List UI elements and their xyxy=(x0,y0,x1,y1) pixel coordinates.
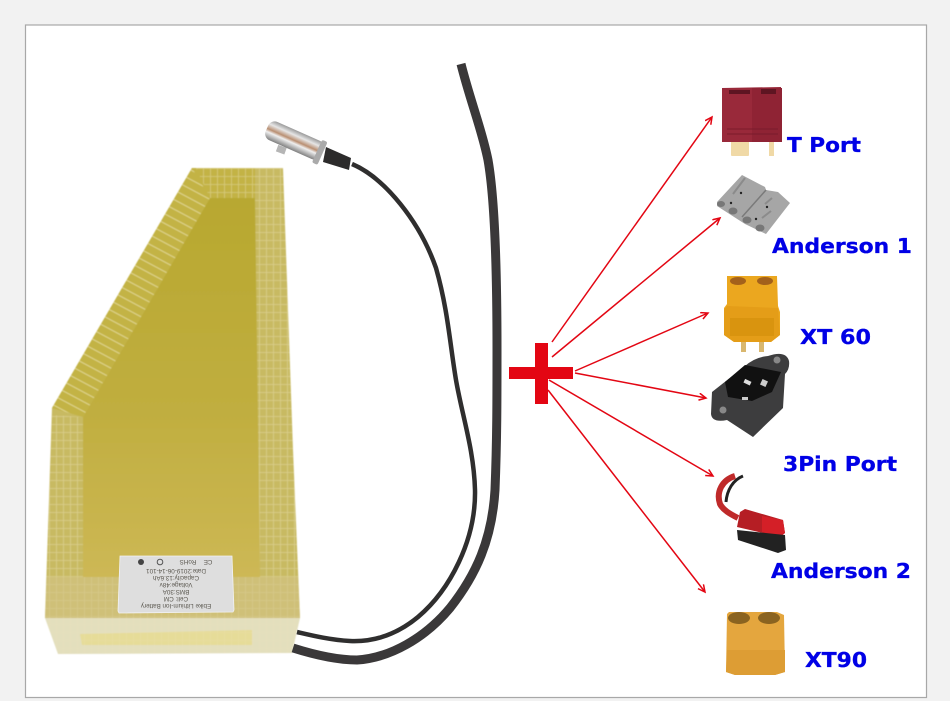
battery grid tape xyxy=(45,168,300,618)
plus sign xyxy=(509,343,573,404)
label: Anderson 2: Anderson 2 xyxy=(771,559,911,583)
battery front face xyxy=(45,618,300,654)
battery specification label: CE xyxy=(204,558,212,565)
battery inner wrap xyxy=(83,198,260,577)
battery specification label: Capacity:13.6Ah xyxy=(152,574,199,581)
label: XT90: XT90 xyxy=(805,648,867,672)
arrow: T Port xyxy=(552,117,712,342)
icon: XT90 connector xyxy=(726,612,785,675)
label: XT 60: XT 60 xyxy=(800,325,871,349)
icon: 3Pin Port socket xyxy=(711,354,789,437)
label: Anderson 1: Anderson 1 xyxy=(772,234,912,258)
label: T Port: T Port xyxy=(787,133,861,157)
icon: Anderson 2 connector xyxy=(719,476,786,553)
connector labels xyxy=(771,133,912,672)
icon: T Port connector xyxy=(722,87,782,156)
label: 3Pin Port: 3Pin Port xyxy=(783,452,897,476)
battery specification label: BMS:30A xyxy=(162,588,189,595)
battery diagonal tape xyxy=(52,168,255,417)
battery top face xyxy=(45,168,300,618)
battery pack xyxy=(45,168,300,654)
battery specification label: Date:2019-06-14-101 xyxy=(146,567,206,574)
battery specification label: Ebike Lithium-Ion Battery xyxy=(140,602,211,609)
arrow: Anderson 1 xyxy=(552,218,720,357)
battery specification label: Voltage:48v xyxy=(159,581,192,588)
thick discharge cable xyxy=(293,64,497,660)
arrow: 3Pin Port xyxy=(575,373,706,398)
arrow: Anderson 2 xyxy=(549,380,713,476)
battery specification label: RoHS xyxy=(180,558,196,565)
battery lower band xyxy=(45,577,300,618)
arrow: XT 60 xyxy=(575,313,708,371)
icon: Anderson 1 connector xyxy=(717,175,790,234)
arrow: XT90 xyxy=(548,390,705,592)
battery specification label: Cell: CM xyxy=(164,595,188,602)
thin charge cable xyxy=(297,164,475,641)
icon: XT 60 connector xyxy=(724,276,780,352)
battery specification label xyxy=(118,556,234,613)
arrows to connectors xyxy=(548,117,720,592)
charge plug xyxy=(262,117,351,170)
